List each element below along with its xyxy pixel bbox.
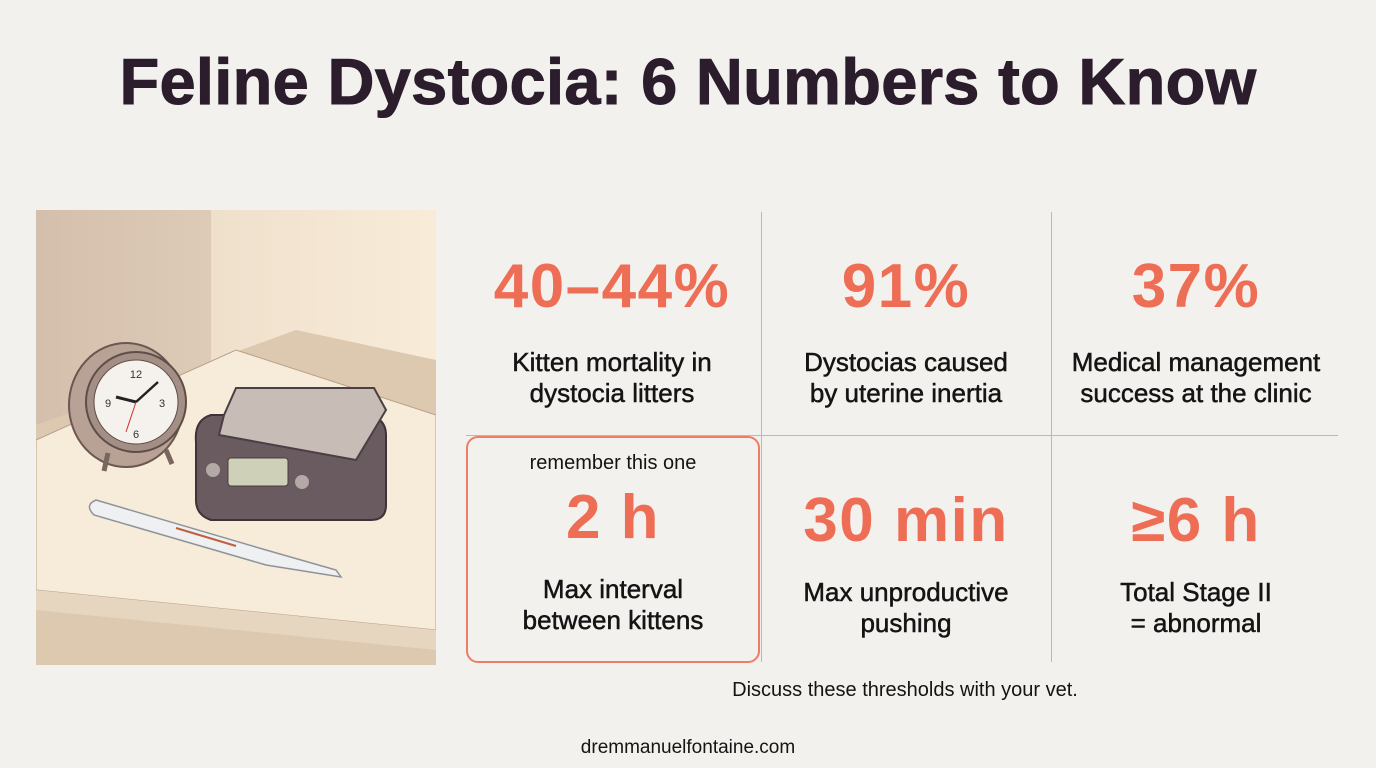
stat: 40-44%: 40–44% [494,252,730,321]
clock [69,343,186,471]
highlighted stat: 2 h: remember this one [530,452,696,474]
title: Feline Dystocia: 6 Numbers to Know [119,45,1257,118]
highlighted stat: 2 h: Max interval [543,574,683,604]
stat: 91%: 91% [842,252,970,321]
clock: 3 [159,398,165,410]
stat: 91%: Dystocias caused [804,347,1008,377]
stat: 37% [1072,252,1320,408]
scale [196,388,386,520]
stat: >=6 h: Total Stage II [1120,577,1272,607]
highlighted stat: 2 h [466,436,760,663]
stat: 37%: success at the clinic [1080,378,1312,408]
thermometer [89,500,341,577]
stat: >=6 h [1120,486,1272,638]
stat: 91%: by uterine inertia [810,378,1002,408]
footer url: dremmanuelfontaine.com [581,737,795,758]
stat: 91% [804,252,1008,408]
stat: >=6 h: = abnormal [1131,608,1261,638]
highlighted stat: 2 h: between kittens [523,605,703,635]
clock: 6 [133,429,139,441]
clock: 12 [130,369,142,381]
stat: 30 min [803,486,1009,638]
note: Discuss these thresholds with your vet. [732,679,1078,701]
stat: 30 min: 30 min [803,486,1009,555]
stat: >=6 h: ≥6 h [1131,486,1261,555]
highlighted stat: 2 h: 2 h [566,483,660,552]
stat: 30 min: Max unproductive [803,577,1009,607]
stat: 37%: Medical management [1072,347,1320,377]
illustration: clock, scale, thermometer [36,210,436,665]
stat: 40-44%: Kitten mortality in [512,347,712,377]
grid lines [761,212,762,662]
clock: 9 [105,398,111,410]
stat: 37%: 37% [1132,252,1260,321]
stat: 30 min: pushing [860,608,952,638]
stat: 40-44% [494,252,730,408]
stat: 40-44%: dystocia litters [530,378,694,408]
